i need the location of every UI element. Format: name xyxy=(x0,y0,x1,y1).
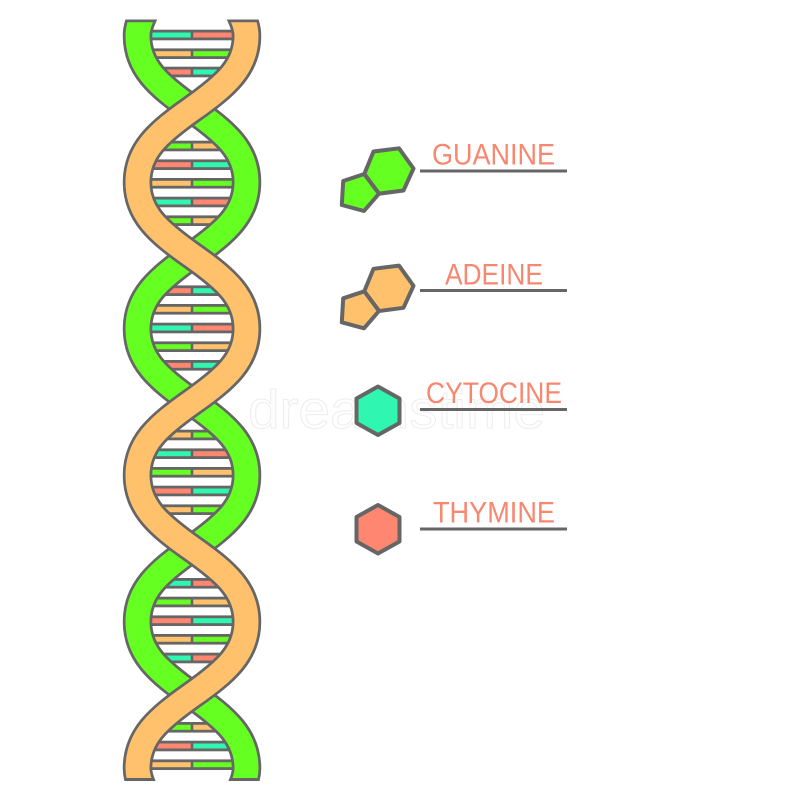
legend: guanine xyxy=(342,138,567,211)
base pair rung 4 xyxy=(148,141,236,151)
icon: adenine molecule xyxy=(342,266,414,328)
label: cytosine: CYTOCINE xyxy=(426,377,562,410)
base pair rung 3 xyxy=(148,67,236,77)
legend: thymine xyxy=(356,497,567,554)
base pair rung 6 xyxy=(148,178,236,189)
base pair rung 24 xyxy=(148,722,236,733)
base pair rung 13 xyxy=(148,360,236,371)
base pair rung 26 xyxy=(148,759,236,770)
base pair rung 10 xyxy=(148,304,236,315)
base pair rung 20 xyxy=(148,597,236,607)
base pairs group 5 xyxy=(148,578,236,663)
base pair rung 16 xyxy=(148,467,236,478)
base pair rung 19 xyxy=(148,578,236,589)
DNA double helix xyxy=(138,12,246,792)
base pair rung 25 xyxy=(148,741,236,751)
base pair rung 21 xyxy=(148,615,236,626)
base pairs group 3 xyxy=(148,285,236,371)
label: thymine: THYMINE xyxy=(433,497,555,530)
base pair rung 5 xyxy=(148,159,236,170)
base pair rung 23 xyxy=(148,653,236,663)
base pair rung 2 xyxy=(148,48,236,59)
base pair rung 8 xyxy=(148,215,236,226)
icon: cytosine hexagon xyxy=(356,386,400,435)
base pair rung 18 xyxy=(148,504,236,515)
base pair rung 7 xyxy=(148,197,236,207)
base pair rung 15 xyxy=(148,448,236,459)
infographic canvas xyxy=(122,20,567,781)
orange strand xyxy=(138,12,246,792)
green strand xyxy=(138,12,246,792)
base pair rung 17 xyxy=(148,486,236,496)
base pair rung 14 xyxy=(148,430,236,440)
base pair rung 9 xyxy=(148,285,236,296)
label: adenine: ADEINE xyxy=(445,258,543,292)
base pair rung 1 xyxy=(148,30,236,40)
base pairs group 2 xyxy=(148,141,236,226)
icon: thymine hexagon xyxy=(356,505,400,554)
base pair rung 12 xyxy=(148,341,236,352)
legend: adenine xyxy=(342,258,567,328)
base pairs group 4 xyxy=(148,430,236,515)
icon: guanine molecule xyxy=(342,148,414,211)
base pairs group 6 xyxy=(148,722,236,770)
base pair rung 11 xyxy=(148,323,236,333)
base pairs group 1 xyxy=(148,30,236,77)
watermark: dreamstime xyxy=(248,380,545,440)
label: guanine: GUANINE xyxy=(432,138,555,172)
base pair rung 22 xyxy=(148,634,236,645)
legend: cytosine xyxy=(356,377,567,435)
